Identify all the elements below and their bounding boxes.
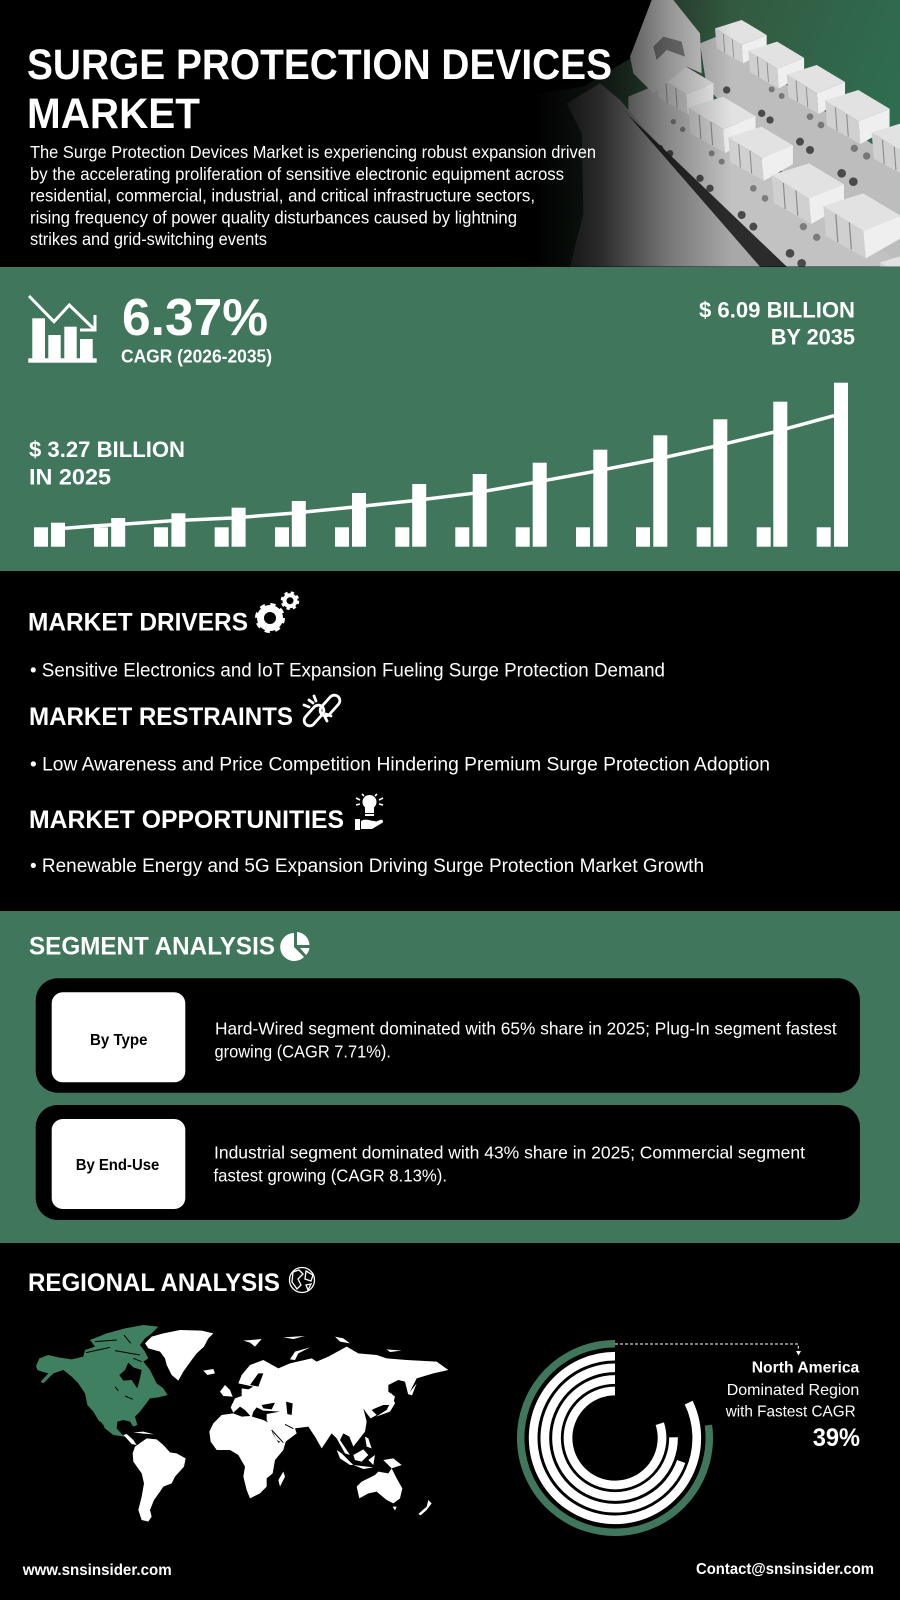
- title: MARKET: [27, 90, 200, 138]
- heading: segment analysis: SEGMENT ANALYSIS: [29, 932, 275, 960]
- title: SURGE PROTECTION DEVICES: [27, 41, 612, 89]
- icon: gears: [257, 593, 298, 631]
- label: 2025 value: $ 3.27 BILLION: [29, 437, 185, 462]
- description text: The Surge Protection Devices Market is experiencing robust expansion driven: [30, 142, 596, 162]
- panel: segment analysis: [0, 911, 900, 1243]
- description text: [30, 142, 596, 249]
- label: 2035 value: [699, 298, 855, 350]
- icon: chart with arrow: [28, 296, 97, 363]
- opportunity item: • Renewable Energy and 5G Expansion Driving Surge Protection Market Growth: [30, 856, 704, 877]
- icon: pie chart: [280, 932, 310, 961]
- description text: by the accelerating proliferation of sensitive electronic equipment across: [30, 164, 564, 184]
- callout: North America: with Fastest CAGR: [725, 1404, 856, 1421]
- bar chart with growth line: [34, 383, 848, 547]
- description text: rising frequency of power quality disturbances caused by lightning: [30, 207, 517, 227]
- callout: North America: North America: [752, 1360, 859, 1377]
- map: other continents: [123, 1330, 448, 1522]
- footer: contact: Contact@snsinsider.com: [696, 1561, 874, 1578]
- card: by type: Hard-Wired segment dominated with 65% share in 2025; Plug-In segment fastest: [215, 1018, 837, 1038]
- label: 2025 value: IN 2025: [29, 464, 111, 489]
- footer: website: www.snsinsider.com: [22, 1562, 172, 1579]
- heading: market drivers: MARKET DRIVERS: [28, 609, 248, 637]
- CAGR figure: CAGR (2026-2035): [121, 345, 272, 366]
- card: by type: [36, 978, 860, 1093]
- label: 2035 value: BY 2035: [771, 325, 855, 350]
- card: by type: growing (CAGR 7.71%).: [214, 1041, 391, 1061]
- description text: strikes and grid-switching events: [30, 229, 267, 249]
- card: by end-use: [36, 1105, 860, 1220]
- panel: regional analysis: [0, 1243, 900, 1600]
- panel: market dynamics: [0, 571, 900, 911]
- label box: by end-use: [52, 1119, 185, 1209]
- icon: broken link: [302, 693, 342, 728]
- callout: North America: [725, 1360, 860, 1452]
- label: 2035 value: $ 6.09 BILLION: [699, 298, 855, 323]
- card: by end-use: By End-Use: [76, 1157, 159, 1174]
- radial chart: [521, 1344, 709, 1532]
- header photo: surge protection modules: [558, 0, 900, 267]
- title: [27, 41, 612, 138]
- CAGR figure: 6.37%: [122, 289, 268, 347]
- card: by type: By Type: [90, 1032, 148, 1049]
- card: by end-use: fastest growing (CAGR 8.13%).: [214, 1166, 447, 1186]
- callout: North America: 39%: [813, 1424, 860, 1452]
- restraint item: • Low Awareness and Price Competition Hindering Premium Surge Protection Adoption: [30, 755, 770, 776]
- icon: idea in hand: [355, 794, 383, 830]
- panel: market size and CAGR: [0, 267, 900, 571]
- icon: globe: [290, 1268, 314, 1292]
- driver item: • Sensitive Electronics and IoT Expansion Fueling Surge Protection Demand: [30, 661, 665, 682]
- label: 2025 value: [29, 437, 185, 489]
- heading: market restraints: MARKET RESTRAINTS: [29, 703, 293, 731]
- world map: [36, 1325, 448, 1522]
- heading: regional analysis: REGIONAL ANALYSIS: [28, 1269, 280, 1297]
- heading: market opportunities: MARKET OPPORTUNITIES: [29, 806, 344, 834]
- map: North America highlighted: [36, 1325, 168, 1437]
- dashed callout arrow: [615, 1344, 801, 1356]
- description text: residential, commercial, industrial, and critical infrastructure sectors,: [30, 186, 535, 206]
- panel: header: [28, 0, 900, 267]
- callout: North America: Dominated Region: [727, 1382, 859, 1399]
- label box: by type: [52, 992, 185, 1082]
- card: by end-use: Industrial segment dominated with 43% share in 2025; Commercial segment: [214, 1142, 805, 1162]
